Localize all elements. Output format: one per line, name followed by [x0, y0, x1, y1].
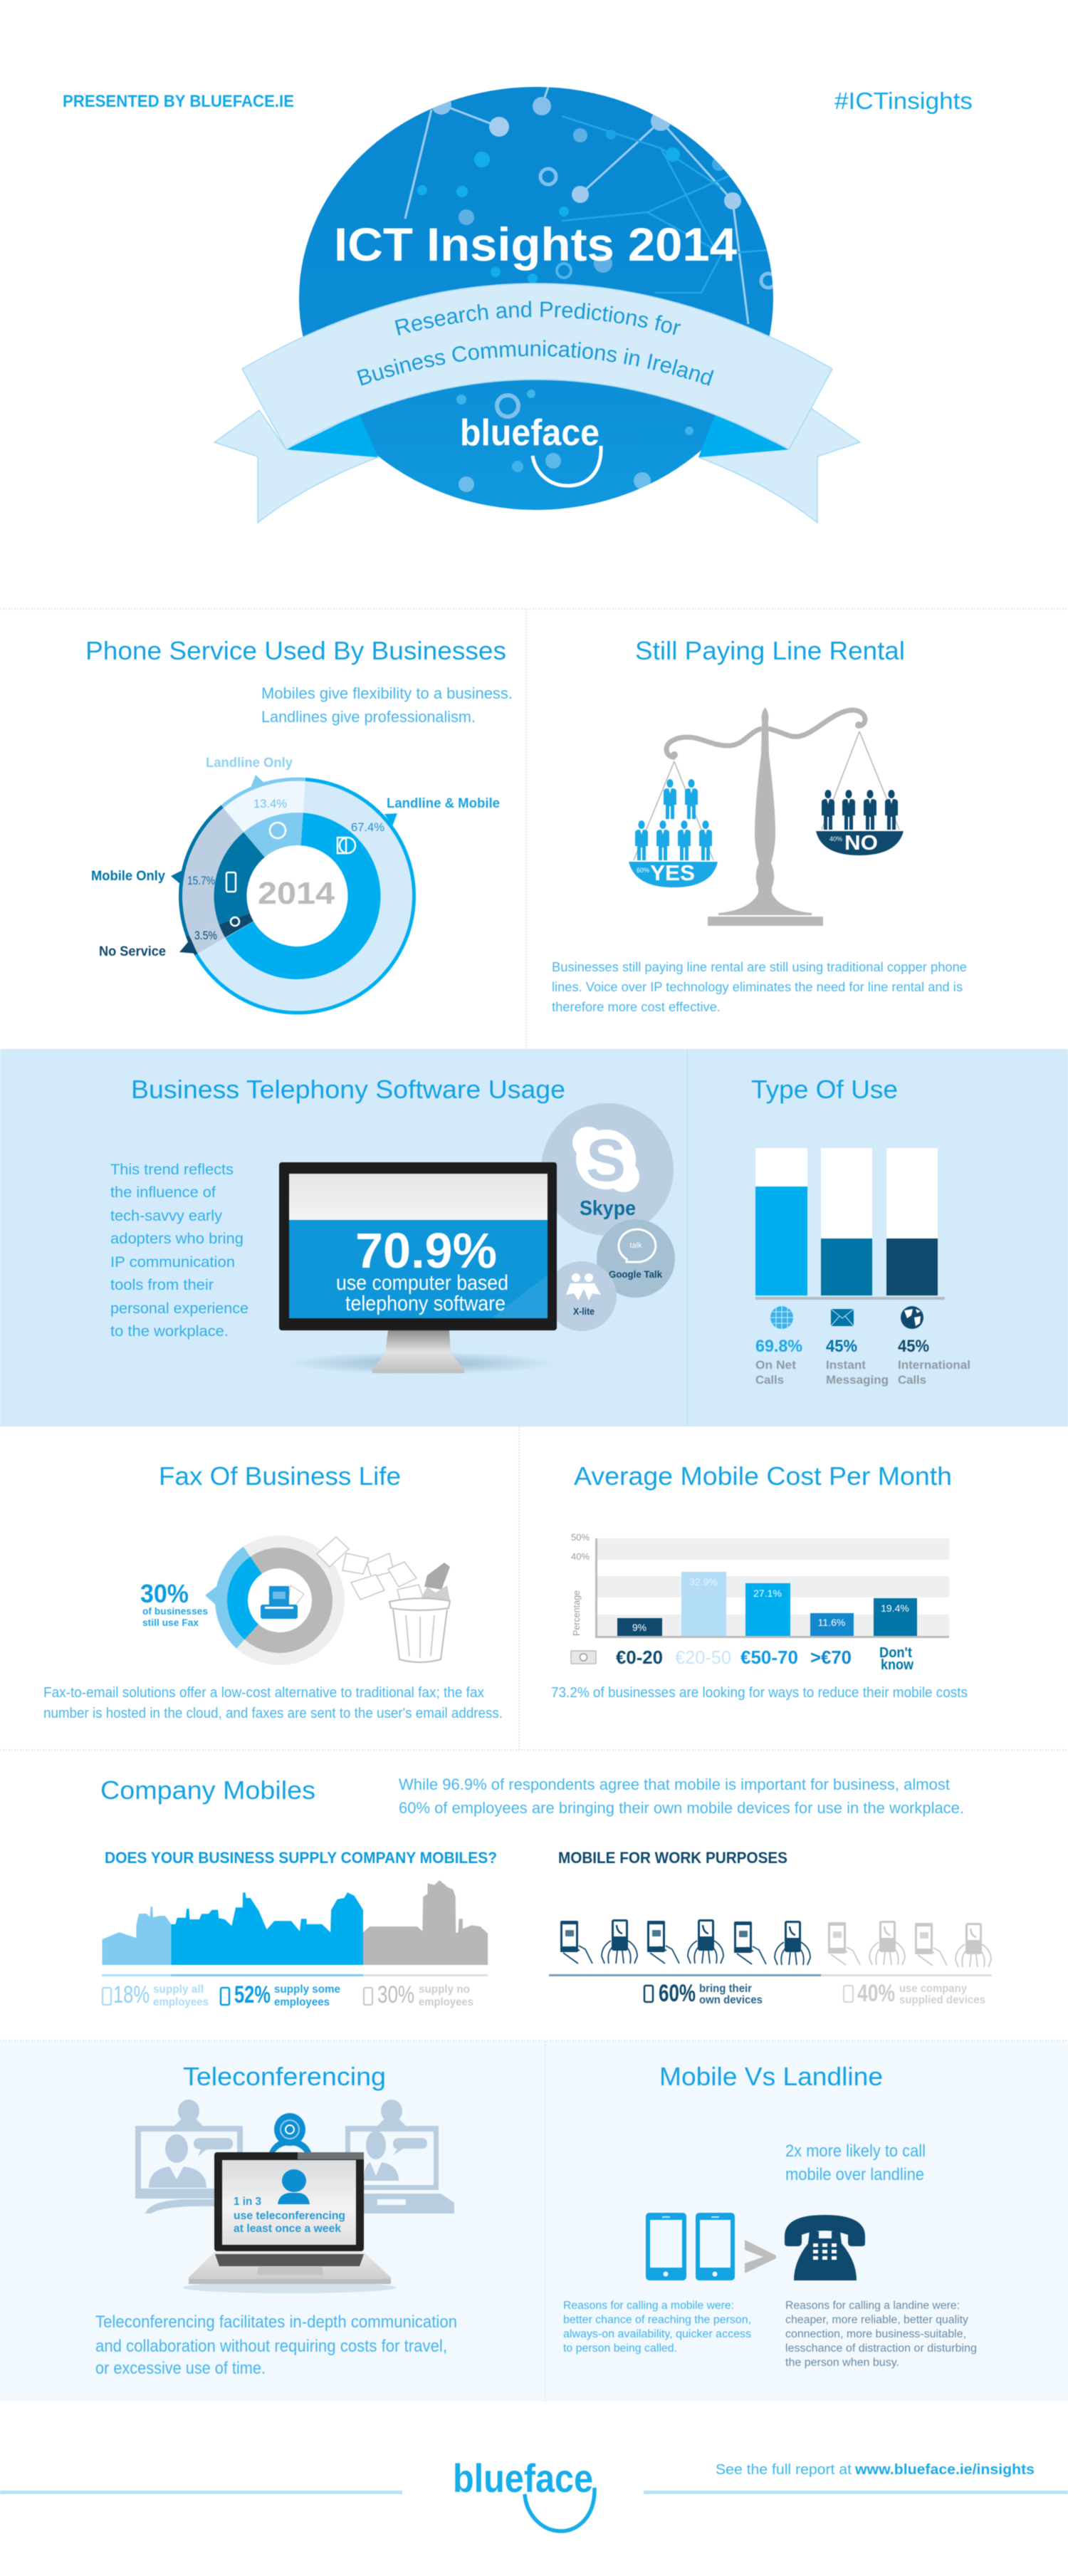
laptop statistic [234, 2196, 345, 2235]
monitor caption: use computer based [336, 1271, 508, 1295]
google talk bubble: talk [629, 1241, 642, 1250]
callout [785, 2142, 926, 2184]
heading: Teleconferencing [183, 2062, 386, 2091]
type of use labels: Calls [898, 1373, 926, 1387]
no pan with people [816, 790, 904, 855]
footer link text [716, 2462, 1035, 2478]
left subheading: DOES YOUR BUSINESS SUPPLY COMPANY MOBILES? [105, 1849, 497, 1867]
skyline chart [102, 1880, 488, 1976]
type of use values: 69.8% [755, 1337, 802, 1356]
icon: world [901, 1306, 923, 1329]
monitor [279, 1162, 557, 1375]
stacked bar chart [755, 1148, 945, 1300]
divider lines [0, 609, 1068, 2040]
type of use values: 45% [898, 1337, 929, 1356]
stat: 30 percent [364, 1981, 473, 2008]
google talk bubble [597, 1219, 675, 1298]
intro text: Landlines give professionalism. [261, 708, 476, 726]
header [63, 86, 973, 524]
type of use labels: International [898, 1358, 970, 1372]
donut labels [91, 756, 500, 959]
network globe disc [299, 87, 775, 510]
donut labels: Mobile Only [91, 869, 165, 884]
blueface logo white [460, 412, 601, 486]
type of use labels: Instant [826, 1358, 866, 1372]
donut percentages: 15.7% [187, 874, 215, 887]
price range labels: €0-20 [616, 1647, 663, 1668]
panel: mobile vs landline [563, 2062, 977, 2369]
description: Fax-to-email solutions offer a low-cost alternative to traditional fax; the fax [43, 1685, 484, 1701]
description: to the workplace. [110, 1323, 229, 1340]
skype bubble: S [586, 1127, 626, 1194]
stat: 30 percent: employees [419, 1996, 473, 2008]
footer rules [0, 2491, 1068, 2494]
type of use labels: Messaging [826, 1373, 889, 1387]
fax statistic: 30% [140, 1579, 189, 1608]
bar chart: 9% [632, 1622, 646, 1633]
donut percentages: 67.4% [351, 820, 384, 834]
panel: teleconferencing [0, 2041, 1068, 2402]
reasons for landline: lesschance of distraction or disturbing [785, 2342, 977, 2355]
intro text: Mobiles give flexibility to a business. [261, 684, 513, 702]
right video monitor [345, 2100, 454, 2213]
description: tools from their [110, 1276, 214, 1293]
reasons for mobile: always-on availability, quicker access [563, 2328, 751, 2340]
bar chart: 19.4% [881, 1602, 909, 1614]
donut percentages: 13.4% [253, 797, 287, 810]
price range labels: Don't [879, 1645, 912, 1661]
blueface logo blue [453, 2456, 595, 2531]
laptop statistic: at least once a week [234, 2223, 341, 2235]
bar chart: 50% [571, 1532, 590, 1543]
balance scale [634, 707, 899, 926]
laptop statistic: use teleconferencing [234, 2210, 345, 2222]
footer link text: See the full report at [716, 2462, 852, 2478]
description [110, 1161, 248, 1340]
description: IP communication [110, 1253, 235, 1271]
icon: headset agent [278, 2169, 310, 2204]
stat: 40 percent: supplied devices [899, 1994, 985, 2006]
description: and collaboration without requiring costs for travel, [95, 2337, 447, 2356]
yes pan with people: YES [650, 860, 695, 885]
callout: mobile over landline [785, 2165, 924, 2184]
band divider [545, 2041, 546, 2402]
reasons for landline: the person when busy. [785, 2357, 899, 2369]
type of use values [755, 1337, 929, 1356]
left video monitor [135, 2100, 243, 2213]
hands holding phones pictogram [549, 1919, 992, 1976]
stat: 18 percent [103, 1981, 209, 2008]
footer [0, 2456, 1068, 2531]
right subheading: MOBILE FOR WORK PURPOSES [558, 1849, 787, 1867]
intro text: 60% of employees are bringing their own mobile devices for use in the workplace. [399, 1799, 964, 1817]
callout: 2x more likely to call [785, 2142, 926, 2161]
bar chart: 40% [571, 1551, 590, 1562]
laptop statistic: 1 in 3 [234, 2196, 261, 2208]
bar chart: 11.6% [818, 1617, 845, 1628]
presented by label: PRESENTED BY BLUEFACE.IE [63, 92, 294, 111]
heading: Company Mobiles [100, 1775, 315, 1805]
stat: 60 percent: own devices [699, 1994, 763, 2006]
type of use labels: On Net [755, 1358, 796, 1372]
panel: still paying line rental [552, 636, 967, 1014]
stat: 40 percent: 40% [857, 1980, 895, 2007]
google talk bubble: Google Talk [609, 1268, 662, 1280]
main title: ICT Insights 2014 [334, 218, 737, 271]
description: lines. Voice over IP technology eliminates the need for line rental and is [552, 980, 963, 994]
fax statistic [140, 1579, 208, 1628]
description [43, 1685, 503, 1721]
blueface logo blue: blueface [453, 2456, 593, 2501]
blueface logo white: blueface [460, 412, 600, 454]
description: tech-savvy early [110, 1207, 222, 1224]
description: Teleconferencing facilitates in-depth communication [95, 2312, 457, 2332]
stat: 18 percent: employees [153, 1996, 209, 2008]
fax donut [197, 1517, 363, 1684]
bar chart: 27.1% [753, 1587, 782, 1599]
stat: 60 percent: 60% [659, 1980, 696, 2007]
type of use values: 45% [826, 1337, 857, 1356]
x-lite bubble [547, 1261, 617, 1331]
description: the influence of [110, 1184, 216, 1201]
stat: 52 percent [221, 1981, 340, 2008]
heading: Type Of Use [751, 1075, 898, 1104]
laptop [183, 2152, 397, 2293]
footer link text: www.blueface.ie/insights [854, 2462, 1035, 2478]
fax statistic: of businesses [142, 1605, 208, 1617]
stat: 60 percent [644, 1980, 763, 2007]
reasons for mobile: Reasons for calling a mobile were: [563, 2300, 734, 2312]
intro text [261, 684, 513, 726]
intro text: While 96.9% of respondents agree that mobile is important for business, almost [399, 1775, 950, 1793]
heading: Business Telephony Software Usage [131, 1075, 565, 1104]
price range labels: know [881, 1657, 913, 1673]
description: Businesses still paying line rental are still using traditional copper phone [552, 960, 967, 974]
monitor caption [336, 1271, 508, 1315]
donut labels: Landline & Mobile [387, 796, 500, 811]
type of use labels: Calls [755, 1373, 784, 1387]
price range labels [616, 1645, 913, 1673]
donut chart [132, 731, 462, 1060]
icon: greater than arrow [745, 2240, 776, 2273]
heading: Mobile Vs Landline [659, 2062, 883, 2091]
icon: two mobile phones [646, 2213, 735, 2280]
bar chart: 32.9% [689, 1576, 718, 1587]
description: 73.2% of businesses are looking for ways to reduce their mobile costs [551, 1685, 968, 1701]
donut segment icons [226, 823, 355, 926]
description: number is hosted in the cloud, and faxes are sent to the user's email address. [43, 1706, 503, 1721]
reasons for landline: Reasons for calling a landine were: [785, 2300, 960, 2312]
stat: 40 percent [844, 1980, 985, 2007]
icon: web globe [770, 1306, 793, 1329]
skype bubble [541, 1103, 674, 1236]
reasons for landline [785, 2300, 977, 2369]
icon: banknote [571, 1651, 596, 1664]
description: personal experience [110, 1300, 248, 1317]
stat: 30 percent: supply no [419, 1983, 470, 1996]
no pan with people: 40% [829, 835, 842, 843]
description: adopters who bring [110, 1230, 244, 1247]
band background [0, 1049, 1068, 1427]
waste bin [389, 1563, 450, 1662]
reasons for landline: cheaper, more reliable, better quality [785, 2314, 968, 2326]
heading: Still Paying Line Rental [635, 636, 905, 665]
stat: 18 percent: supply all [153, 1983, 204, 1996]
heading: Average Mobile Cost Per Month [574, 1461, 952, 1491]
stat: 52 percent: employees [274, 1996, 330, 2008]
flying paper [317, 1537, 424, 1606]
heading: Fax Of Business Life [159, 1461, 401, 1491]
stat: 18 percent: 18% [113, 1981, 150, 2008]
panel: phone service used by businesses [85, 636, 513, 1060]
price range labels: €50-70 [740, 1647, 798, 1668]
description: This trend reflects [110, 1161, 234, 1178]
donut labels: Landline Only [206, 756, 293, 771]
monitor caption: telephony software [345, 1292, 506, 1315]
bar chart [571, 1532, 949, 1638]
hashtag: #ICTinsights [834, 88, 973, 114]
description: therefore more cost effective. [552, 1000, 721, 1014]
webcam [269, 2113, 311, 2152]
donut centre year: 2014 [258, 876, 335, 911]
stat: 60 percent: bring their [699, 1983, 752, 1995]
band background [0, 2041, 1068, 2402]
icon: landline telephone [785, 2215, 865, 2280]
donut percentages: 3.5% [194, 929, 217, 942]
intro text [399, 1775, 964, 1817]
monitor statistic: 70.9% [355, 1223, 497, 1278]
panel: company mobiles [100, 1775, 992, 2008]
donut labels: No Service [99, 944, 166, 959]
no pan with people: NO [844, 832, 878, 855]
yes pan with people: 60% [637, 867, 649, 874]
reasons for landline: connection, more business-suitable, [785, 2328, 966, 2340]
reasons for mobile [563, 2300, 751, 2355]
price range labels: >€70 [810, 1647, 852, 1668]
panel: fax of business life [43, 1461, 503, 1721]
stat: 52 percent: supply some [274, 1983, 340, 1996]
type of use labels [755, 1358, 970, 1387]
stat: 30 percent: 30% [377, 1981, 414, 2008]
icon: fax machine [261, 1585, 304, 1619]
price range labels: €20-50 [675, 1647, 731, 1668]
stat: 52 percent: 52% [234, 1981, 271, 2008]
band divider [686, 1049, 688, 1427]
reasons for mobile: better chance of reaching the person, [563, 2314, 751, 2326]
stat: 40 percent: use company [899, 1983, 967, 1995]
ribbon banner: Business Communications in Ireland [356, 339, 715, 386]
donut percentages [187, 797, 384, 942]
panel: average mobile cost per month [551, 1461, 968, 1701]
yes pan with people [629, 779, 718, 887]
description [95, 2312, 457, 2378]
donut label pointers [171, 775, 397, 954]
reasons for mobile: to person being called. [563, 2342, 677, 2355]
description: or excessive use of time. [95, 2359, 266, 2378]
panel: business telephony software usage [0, 1049, 1068, 1427]
description [552, 960, 967, 1014]
ribbon banner [213, 282, 862, 524]
icon: envelope [831, 1309, 854, 1326]
x-lite bubble: X-lite [573, 1305, 595, 1317]
fax statistic: still use Fax [142, 1617, 199, 1628]
skype bubble: Skype [580, 1197, 636, 1220]
bar chart: Percentage [571, 1590, 582, 1636]
heading: Phone Service Used By Businesses [85, 636, 506, 665]
ribbon banner: Research and Predictions for [394, 301, 681, 336]
panel: type of use [751, 1075, 970, 1387]
